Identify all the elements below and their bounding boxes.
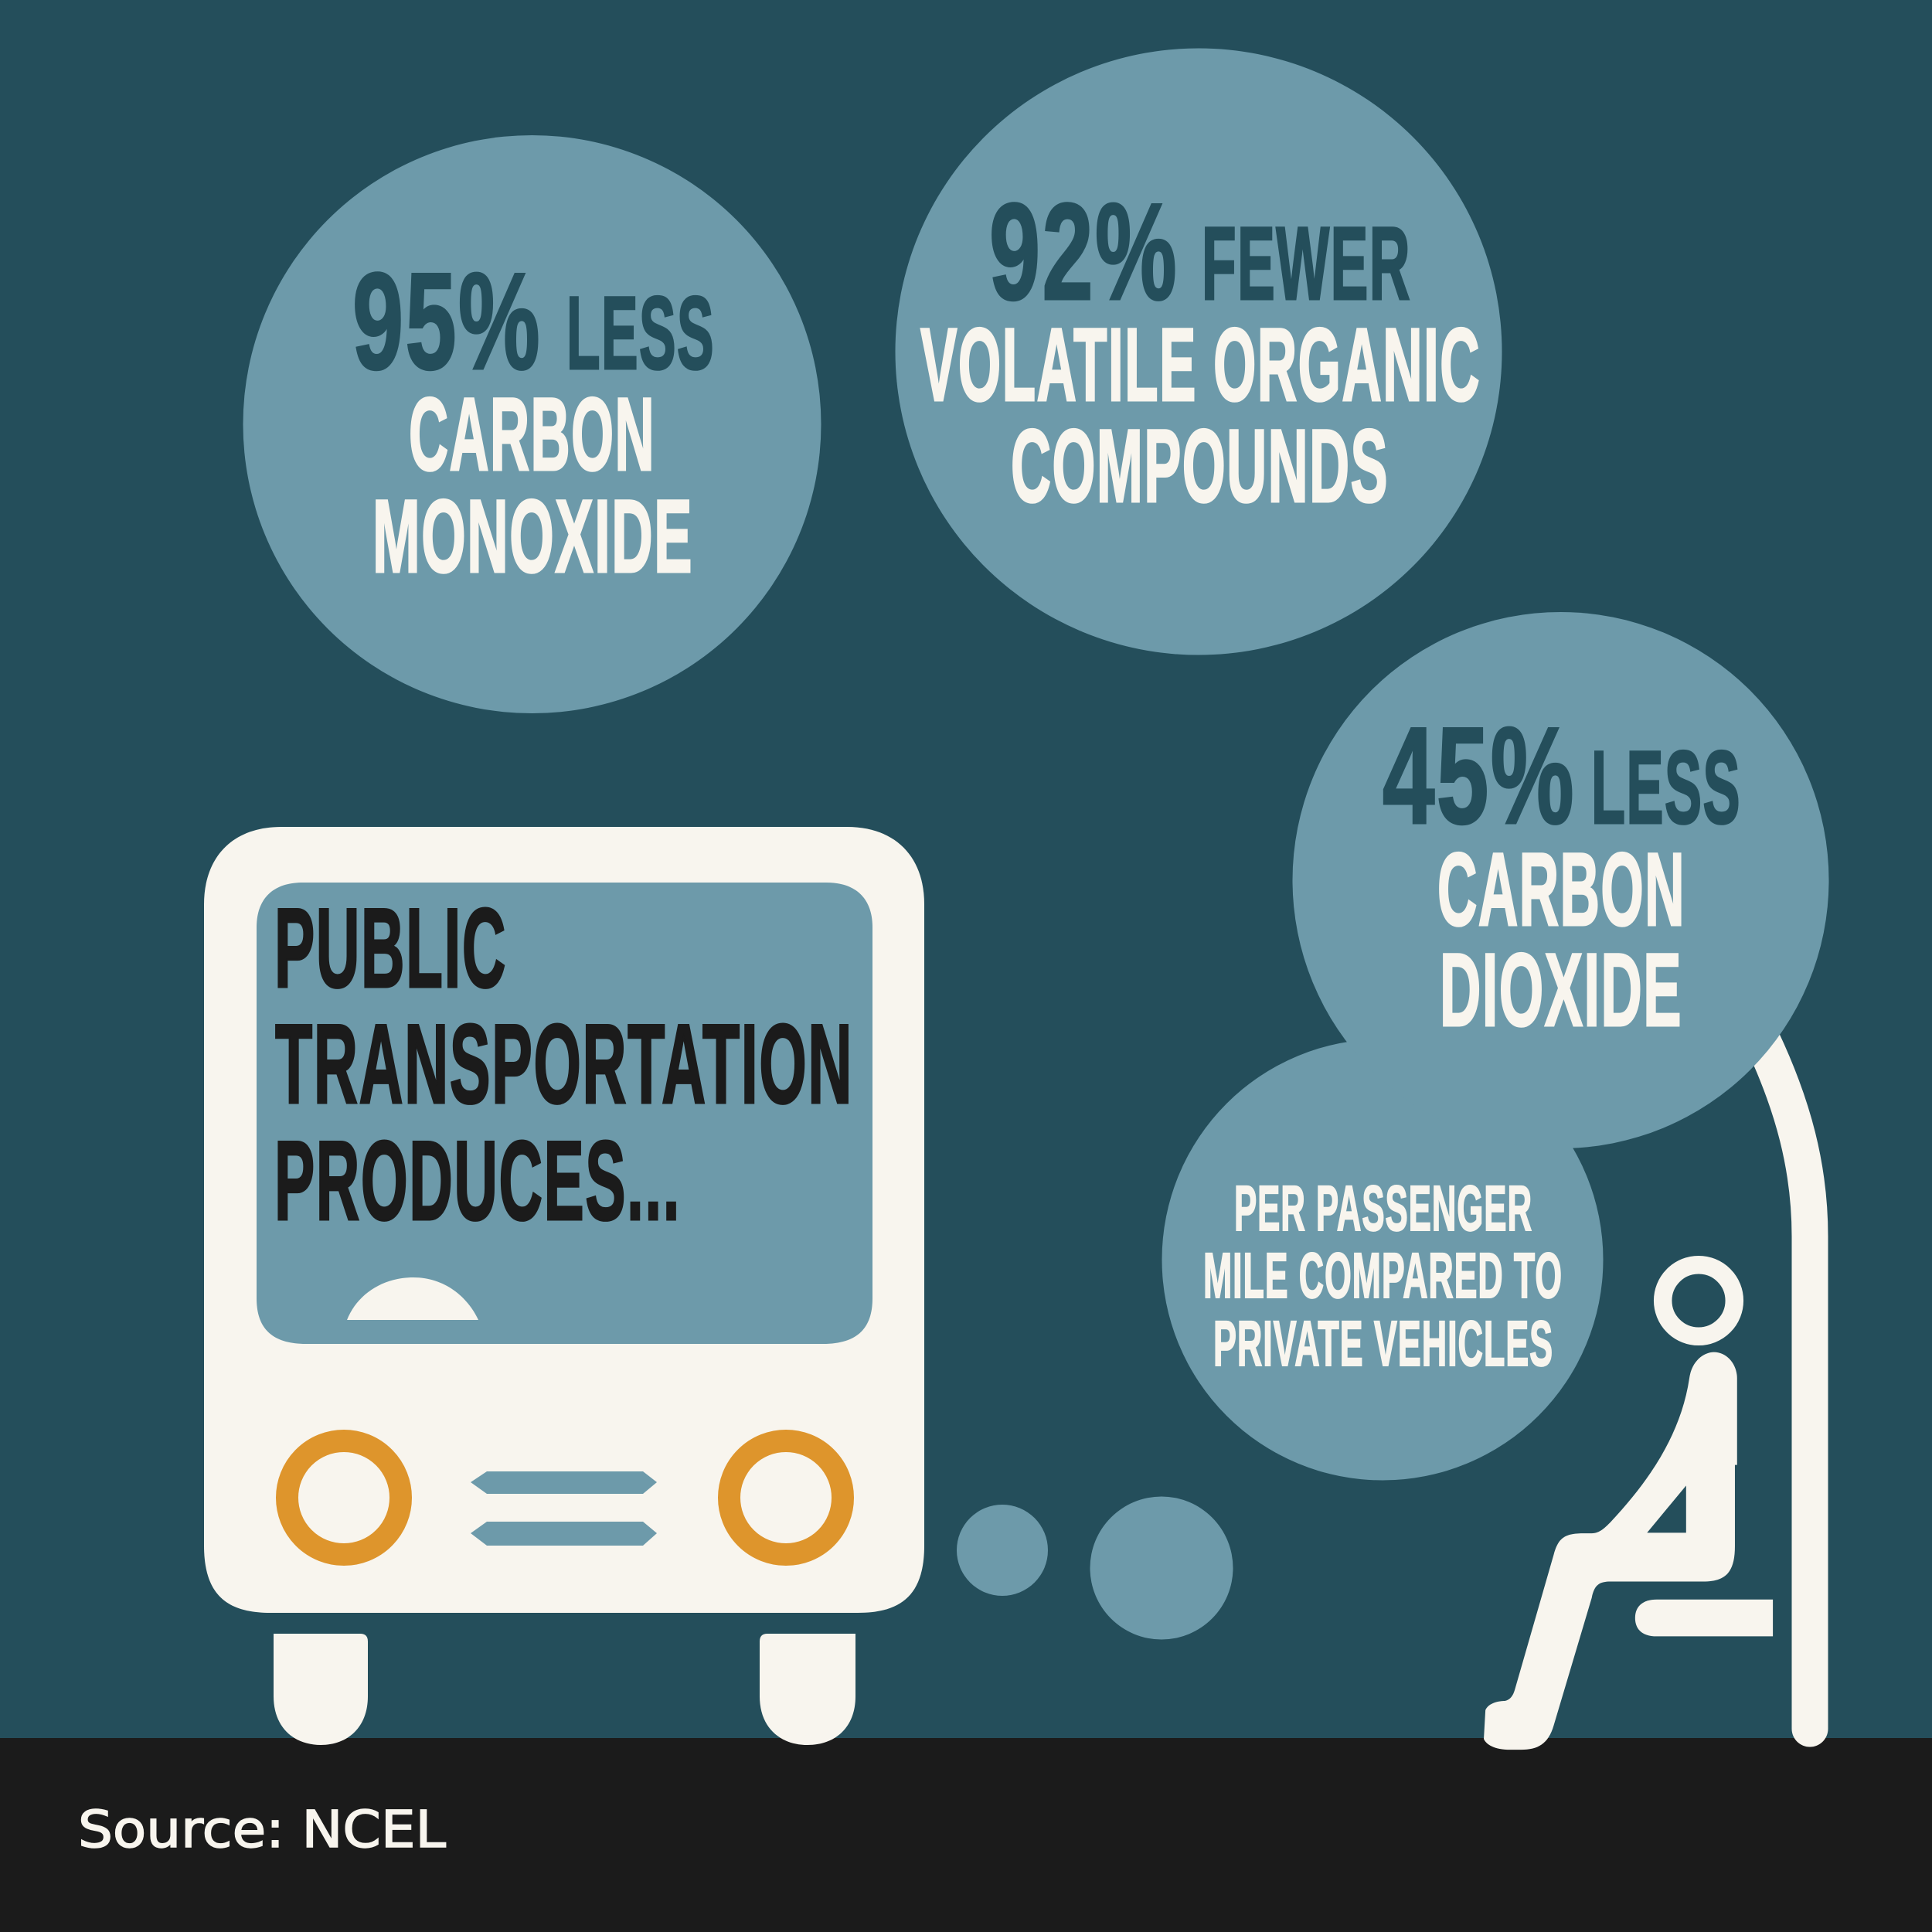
seated passenger	[1484, 1265, 1773, 1750]
comparison note	[1203, 1172, 1563, 1379]
headline line 1: PUBLIC	[274, 885, 507, 1011]
pollutant: carbon: CARBON	[1437, 832, 1685, 947]
grille bar bottom	[471, 1522, 657, 1546]
bus stop pole	[1762, 1039, 1810, 1729]
left wheel	[274, 1634, 368, 1745]
bus	[204, 827, 924, 1745]
bubble: per passenger mile	[1162, 1039, 1603, 1481]
pollutant: dioxide: DIOXIDE	[1440, 933, 1682, 1048]
windshield	[257, 883, 872, 1344]
bubble: volatile organic compounds	[895, 48, 1502, 655]
note line 2: MILE COMPARED TO	[1203, 1240, 1563, 1311]
pollutant: monoxide: MONOXIDE	[372, 479, 693, 594]
stat unit: less: LESS	[566, 276, 715, 391]
stat: 95%: 95%	[352, 244, 542, 398]
right wheel	[760, 1634, 855, 1745]
pollutant: carbon: CARBON	[409, 377, 655, 492]
bench seat	[1635, 1600, 1773, 1636]
thought bubble: large	[1090, 1496, 1233, 1640]
bubble: carbon dioxide	[1292, 612, 1828, 1148]
footer band	[0, 1738, 1932, 1932]
grille bar top	[471, 1471, 657, 1494]
stat unit: fewer: FEWER	[1202, 206, 1411, 321]
passenger head	[1663, 1265, 1734, 1336]
bubble: carbon monoxide	[243, 135, 821, 713]
driver head	[347, 1277, 478, 1320]
passenger body	[1484, 1352, 1737, 1750]
note line 1: PER PASSENGER	[1234, 1172, 1532, 1244]
stat: 92%: 92%	[989, 175, 1179, 328]
bus body	[204, 827, 924, 1613]
right headlight	[730, 1440, 842, 1555]
pollutant: compounds: COMPOUNDS	[1011, 409, 1389, 524]
source note: Source: NCEL	[78, 1800, 446, 1859]
thought bubble: small	[957, 1505, 1048, 1596]
headline line 2: TRANSPORTATION	[275, 1001, 853, 1127]
note line 3: PRIVATE VEHICLES	[1213, 1308, 1553, 1379]
left headlight	[287, 1440, 400, 1555]
stat unit: less: LESS	[1591, 730, 1741, 845]
stat: 45%: 45%	[1383, 699, 1576, 852]
headline line 3: PRODUCES...	[274, 1117, 681, 1243]
